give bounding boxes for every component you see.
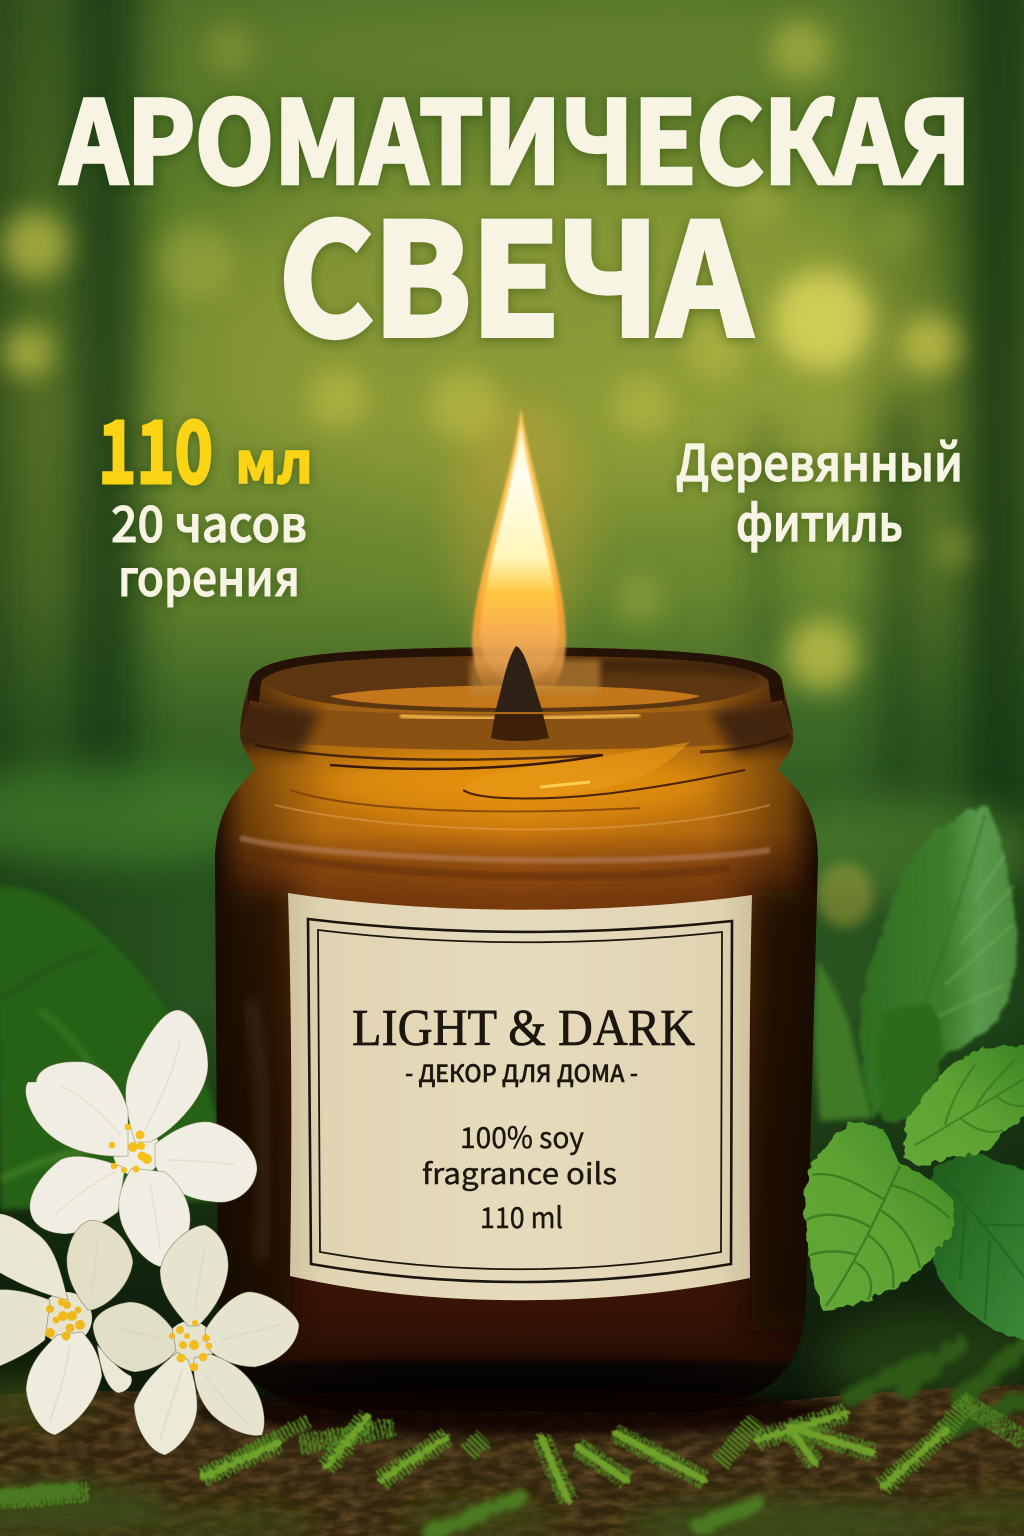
moss fronds feathers [0,1400,1024,1500]
flower top stamens [109,1124,152,1173]
callout: wooden wick: Деревянный [676,424,963,496]
label subtitle: - ДЕКОР ДЛЯ ДОМА - [405,1054,638,1089]
icon: white flower left [0,1214,133,1435]
label details [422,1115,617,1237]
shoulder highlights [275,805,770,829]
flower right stamens [169,1320,212,1371]
label double border [308,919,732,1282]
title [60,52,971,380]
ground with moss [0,1345,1024,1536]
outer rim [248,648,784,706]
wax swirl [546,742,690,776]
lower right dark leaf [927,1154,1024,1342]
jar shading and reflections [215,648,818,1363]
icon: white flower right [93,1225,299,1455]
callout: volume and burn time [98,383,313,611]
callout: wooden wick: фитиль [736,484,903,556]
label [288,893,752,1300]
moss fronds cores [203,1413,946,1500]
inside rim wall [262,656,768,712]
callout: volume and burn time: мл [235,418,313,500]
label details: 110 ml [480,1195,563,1237]
wick [491,646,549,741]
dark foliage behind lower jar [0,1000,1024,1420]
callout: wooden wick [676,424,963,556]
right bright leaf [903,1045,1024,1166]
icon: mint leaves foreground [804,1045,1024,1342]
blurred foreground fronds [0,1490,757,1533]
icon: left background leaf [0,887,218,1210]
icon: white flower top [26,1010,257,1267]
callout: volume and burn time: горения [118,539,300,611]
lower left big bright leaf [804,1123,954,1311]
callout: volume and burn time: 20 часов [111,485,307,557]
candle jar [200,640,840,1410]
label details: fragrance oils [422,1151,617,1193]
label details: 100% soy [460,1115,584,1157]
jar silhouette fill [215,647,818,1405]
flower left stamens [45,1298,85,1340]
blurred moss patches [0,1376,1024,1536]
callout: volume and burn time: 110 [98,383,213,508]
title: СВЕЧА [279,159,752,380]
label brand: LIGHT & DARK [352,1000,695,1057]
dark moss mass right [850,1345,1024,1430]
icon: right mint leaves behind jar [815,805,1017,1121]
flame [450,400,590,690]
